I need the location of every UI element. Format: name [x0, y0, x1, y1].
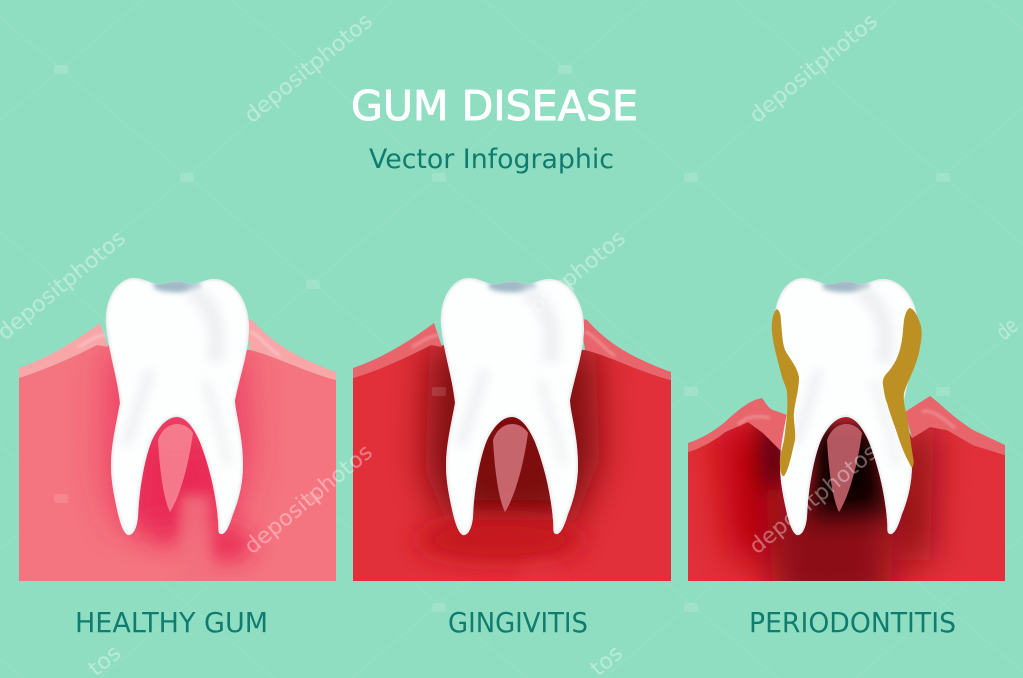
gum top edge	[353, 318, 671, 380]
watermark camera icons	[54, 65, 950, 612]
plaque: right	[883, 308, 922, 468]
plaque: left	[772, 309, 799, 476]
inner root	[827, 424, 862, 512]
tooth	[441, 278, 584, 535]
gum body	[688, 417, 1005, 581]
title: GUM DISEASE	[351, 82, 638, 130]
tooth	[775, 278, 918, 535]
label: healthy gum: HEALTHY GUM	[75, 606, 268, 639]
gum edge highlight	[412, 332, 615, 356]
gum edge highlight	[738, 411, 955, 428]
inner root	[158, 424, 193, 512]
label: gingivitis: GINGIVITIS	[448, 606, 588, 639]
gum top edge	[688, 396, 1005, 455]
gum top edge	[19, 318, 336, 380]
watermarks: depositphotos	[240, 440, 378, 560]
subtitle: Vector Infographic	[369, 144, 614, 175]
gum edge highlight	[78, 332, 280, 356]
watermarks: depositphotos	[240, 9, 378, 129]
label: periodontitis: PERIODONTITIS	[749, 606, 956, 639]
gum body	[19, 345, 336, 590]
panel: periodontitis	[688, 278, 1005, 610]
watermarks: depositphotos	[745, 9, 883, 129]
panel: gingivitis	[353, 278, 671, 592]
gum body	[353, 345, 671, 592]
tooth	[106, 278, 249, 535]
inner root	[493, 424, 528, 512]
watermarks: depositphotos	[745, 440, 883, 560]
watermarks: depositphotos	[493, 226, 631, 346]
panel: healthy gum	[19, 278, 336, 590]
